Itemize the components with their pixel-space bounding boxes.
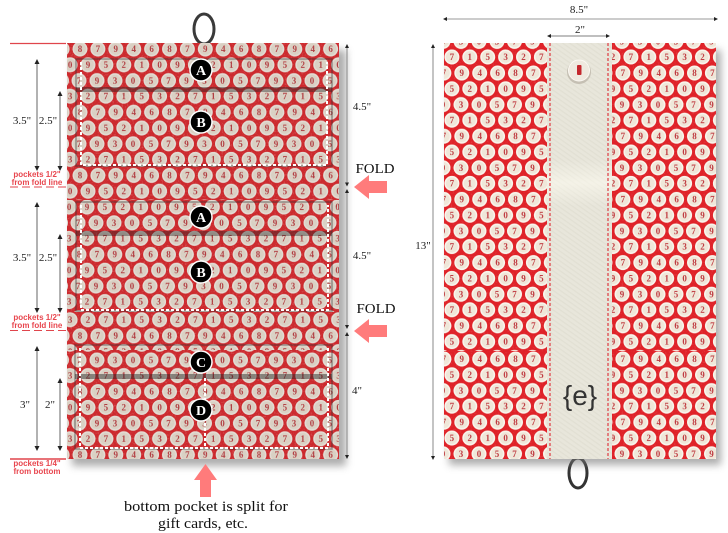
- dimension: 2.5 inch upper: [39, 91, 62, 171]
- dimension: 2 inch ribbon width: 2": [575, 24, 585, 36]
- dimension: 8.5 inch width: [443, 4, 718, 21]
- caption: bottom pocket: [124, 499, 288, 532]
- dimension: 8.5 inch width: 8.5": [570, 4, 588, 16]
- ribbon: [547, 43, 612, 459]
- dimension: 2.5 inch middle: [39, 234, 62, 313]
- caption: bottom pocket: bottom pocket is split for: [124, 499, 288, 515]
- note: pockets from fold line, upper: [10, 170, 66, 187]
- badge D: D: [196, 404, 206, 419]
- note: pockets from bottom: from bottom: [13, 467, 61, 476]
- note: pockets from fold line, lower: pockets 1/2": [13, 313, 61, 322]
- loop: top hanger: [194, 14, 214, 44]
- pockets A and B, middle section: [76, 202, 332, 311]
- dimension: 3.5 inch upper: [13, 59, 40, 171]
- panel: inside view with pockets: [67, 43, 339, 459]
- dimension: 4.5 inch upper: [345, 44, 371, 186]
- dimension: 4.5 inch upper: 4.5": [353, 101, 371, 113]
- icon: button with red slot: [567, 60, 591, 84]
- dimension: 2.5 inch upper: 2.5": [39, 115, 57, 127]
- note: pockets from fold line, lower: [10, 313, 66, 330]
- dimension: 4.5 inch lower: [345, 189, 371, 329]
- arrow: fold lower: [354, 319, 387, 343]
- note: pockets from bottom: [10, 459, 66, 476]
- red rule: top edge: [10, 42, 66, 44]
- dimension: 3.5 inch middle: 3.5": [13, 252, 31, 264]
- panel shadows: [72, 50, 721, 466]
- panel: outside view with ribbon: [444, 43, 716, 459]
- dimension: 4 inch: [345, 332, 362, 459]
- arrow: bottom pocket split: [194, 464, 217, 497]
- dimension: 2 inch ribbon width: [547, 24, 610, 38]
- arrow: fold upper: [354, 175, 387, 199]
- dimension: 3 inch: 3": [20, 399, 30, 411]
- note: pockets from bottom: pockets 1/4": [13, 459, 61, 468]
- dimension: 2 inch: 2": [45, 399, 55, 411]
- dimension: 13 inch height: [415, 44, 435, 460]
- dimension: 2 inch: [45, 378, 62, 451]
- label: FOLD upper: FOLD: [356, 162, 394, 177]
- dimension: 2.5 inch middle: 2.5": [39, 252, 57, 264]
- badge A upper: A: [196, 64, 207, 79]
- label: {e}: {e}: [563, 380, 597, 411]
- badge B upper: [190, 111, 212, 133]
- pockets C and D, bottom section: [75, 345, 332, 449]
- dimension: 13 inch height: 13": [415, 240, 431, 252]
- dimension: 4 inch: 4": [352, 385, 362, 397]
- badge A middle: [190, 206, 212, 228]
- note: pockets from fold line, lower: from fold line: [12, 321, 63, 330]
- badge C: [190, 351, 212, 373]
- caption: bottom pocket: gift cards, etc.: [158, 516, 248, 532]
- pockets A and B, upper section: [76, 59, 332, 166]
- badge B middle: B: [196, 266, 206, 281]
- dimension: 3.5 inch middle: [13, 202, 40, 313]
- badge A middle: A: [196, 211, 207, 226]
- badge C: C: [196, 356, 206, 371]
- badge B middle: [190, 261, 212, 283]
- label: FOLD lower: FOLD: [356, 302, 396, 317]
- loop: bottom hanger: [569, 458, 587, 488]
- note: pockets from fold line, upper: pockets 1/2": [13, 170, 61, 179]
- dimension: 3 inch: [20, 346, 40, 451]
- dimension: 3.5 inch upper: 3.5": [13, 115, 31, 127]
- note: pockets from fold line, upper: from fold line: [12, 178, 63, 187]
- badge D: [190, 399, 212, 421]
- badge B upper: B: [196, 116, 206, 131]
- badge A upper: [190, 59, 212, 81]
- dimension: 4.5 inch lower: 4.5": [353, 250, 371, 262]
